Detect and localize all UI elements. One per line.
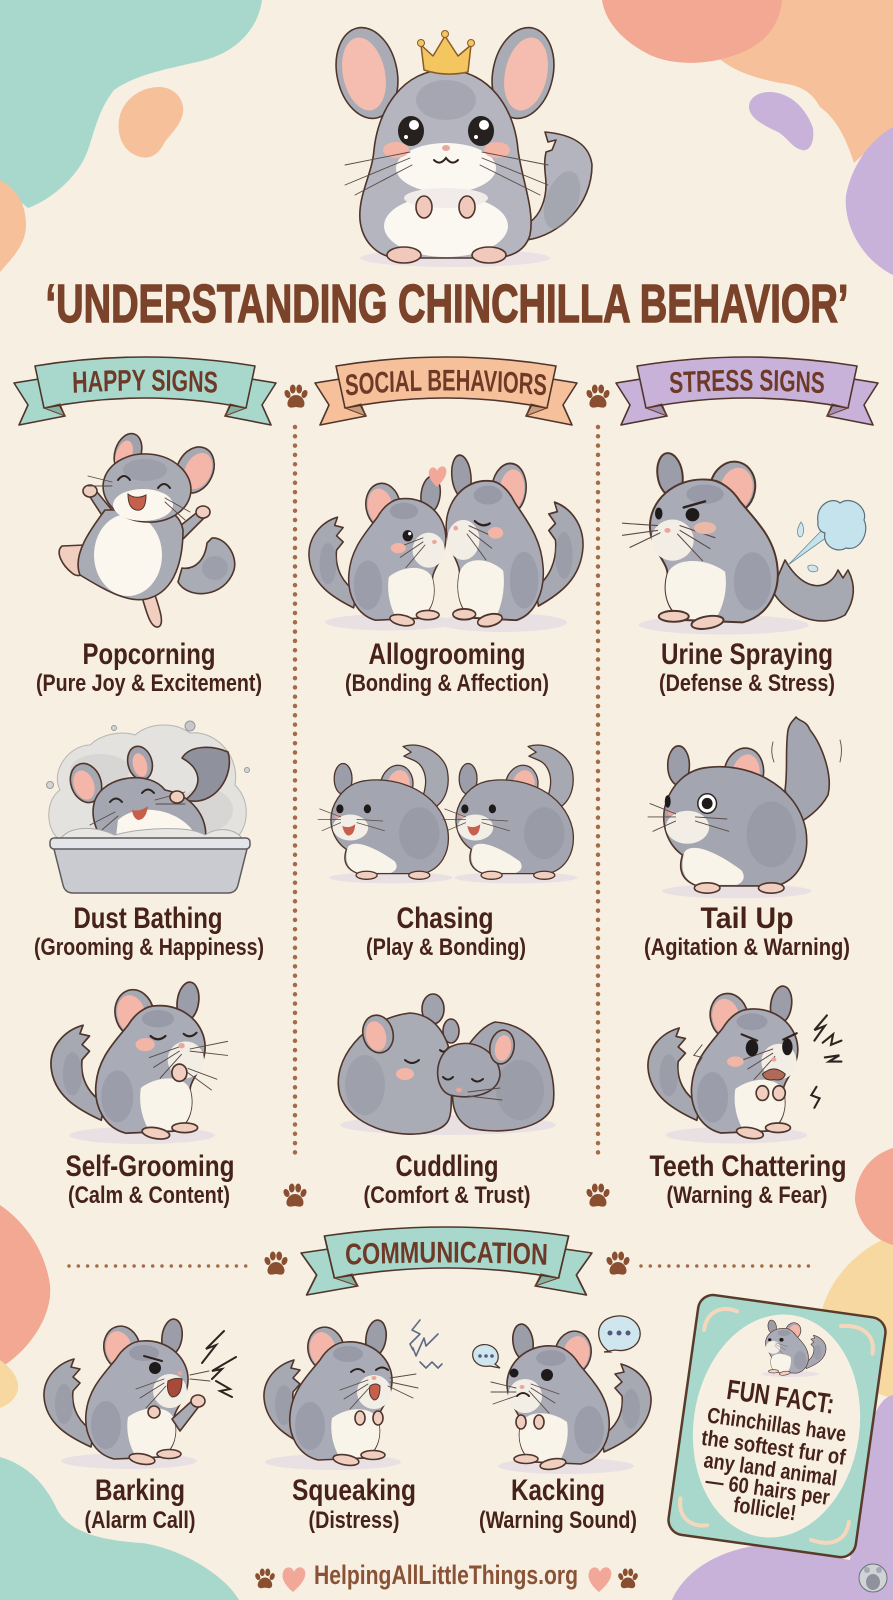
panel: stress signs xyxy=(615,356,879,1209)
blob: top-left teal xyxy=(0,0,262,208)
dotted line right xyxy=(641,1264,815,1268)
illustration: popcorning xyxy=(59,430,235,627)
label: tail up: Tail Up xyxy=(700,902,794,935)
blob: bottom-left yellow xyxy=(0,1360,18,1408)
label: barking xyxy=(84,1474,196,1534)
label: barking: Barking xyxy=(95,1474,185,1507)
banner: social behaviors xyxy=(314,356,578,426)
banner: stress signs xyxy=(615,356,879,426)
callout: fun fact card xyxy=(667,1293,887,1559)
illustration: self-grooming xyxy=(51,981,228,1144)
icon: paw left xyxy=(263,1252,289,1275)
label: kacking xyxy=(479,1474,637,1534)
icon: heart right xyxy=(589,1567,611,1592)
icon: speech bubble small xyxy=(473,1345,500,1368)
label: tail up: (Agitation & Warning) xyxy=(644,934,850,961)
callout: fun fact card: follicle! xyxy=(732,1492,798,1525)
icon: paw lower right xyxy=(585,1184,611,1207)
banner: stress signs: STRESS SIGNS xyxy=(670,370,824,394)
label: cuddling: Cuddling xyxy=(396,1150,498,1183)
blob: bottom-right purple xyxy=(672,1395,893,1600)
label: popcorning: (Pure Joy & Excitement) xyxy=(36,670,262,697)
callout: fun fact card: Chinchillas have xyxy=(706,1402,848,1447)
label: dust bathing: (Grooming & Happiness) xyxy=(34,934,264,961)
label: self-grooming: (Calm & Content) xyxy=(68,1182,230,1209)
label: self-grooming: Self-Grooming xyxy=(66,1150,234,1183)
icon: paw right xyxy=(605,1252,631,1275)
label: dust bathing: Dust Bathing xyxy=(74,902,222,935)
icon: paw right xyxy=(617,1569,639,1588)
label: dust bathing xyxy=(34,902,264,961)
blob: left peach xyxy=(0,180,26,272)
label: squeaking xyxy=(292,1474,416,1534)
label: teeth chattering: (Warning & Fear) xyxy=(666,1182,828,1209)
label: kacking: (Warning Sound) xyxy=(479,1507,637,1534)
illustration: kacking xyxy=(473,1316,651,1474)
illustration: tail up xyxy=(648,717,842,898)
banner: communication: COMMUNICATION xyxy=(346,1242,547,1265)
illustration: allogrooming xyxy=(309,454,583,632)
banner: social behaviors: SOCIAL BEHAVIORS xyxy=(346,370,546,396)
label: chasing: Chasing xyxy=(396,902,494,935)
callout: fun fact card: any land animal xyxy=(702,1447,839,1491)
blob: small purple xyxy=(749,92,813,150)
banner: communication xyxy=(300,1226,593,1296)
label: popcorning: Popcorning xyxy=(82,638,216,671)
icon: paw top left xyxy=(283,384,309,408)
illustration: squeaking xyxy=(264,1319,442,1470)
callout: fun fact card: the softest fur of xyxy=(700,1425,848,1470)
label: allogrooming: Allogrooming xyxy=(368,638,526,671)
panel: happy signs xyxy=(13,356,316,1209)
banner: happy signs: HAPPY SIGNS xyxy=(73,370,217,393)
icon: paw xyxy=(254,1569,276,1588)
label: cuddling: (Comfort & Trust) xyxy=(364,1182,530,1209)
label: tail up xyxy=(644,902,850,961)
panel: social behaviors xyxy=(308,356,584,1209)
label: popcorning xyxy=(36,638,262,697)
banner: happy signs xyxy=(13,356,277,426)
label: chasing: (Play & Bonding) xyxy=(366,934,526,961)
illustration: dust bathing xyxy=(46,721,250,893)
icon: heart xyxy=(283,1567,305,1592)
icon: small chinchilla xyxy=(762,1320,826,1377)
label: urine spraying: (Defense & Stress) xyxy=(659,670,835,697)
blob: top-right coral xyxy=(602,0,782,63)
blob: small peach xyxy=(119,87,183,158)
label: kacking: Kacking xyxy=(511,1474,605,1507)
dotted line left xyxy=(69,1264,253,1268)
icon: speech bubble large xyxy=(599,1316,640,1352)
label: teeth chattering: Teeth Chattering xyxy=(650,1150,846,1183)
dotted divider right xyxy=(596,427,600,1155)
blob: bottom-left coral xyxy=(0,1205,50,1368)
illustration: chasing xyxy=(318,745,577,883)
footer xyxy=(254,1560,639,1592)
label: allogrooming xyxy=(345,638,549,697)
label: self-grooming xyxy=(66,1150,234,1209)
blob: bottom-right coral xyxy=(855,1148,893,1245)
illustration: teeth chattering xyxy=(648,985,841,1144)
label: chasing xyxy=(366,902,526,961)
blob: bottom-right yellow xyxy=(822,1235,893,1398)
label: barking: (Alarm Call) xyxy=(84,1507,196,1534)
blob: bottom-left teal xyxy=(0,1457,239,1600)
label: urine spraying: Urine Spraying xyxy=(661,638,833,671)
icon: heart xyxy=(429,466,446,487)
hero chinchilla with crown xyxy=(328,22,592,267)
label: teeth chattering xyxy=(650,1150,846,1209)
callout: fun fact card: — 60 hairs per xyxy=(704,1468,832,1510)
callout: fun fact card: FUN FACT: xyxy=(725,1374,836,1420)
illustration: urine spraying xyxy=(622,452,866,634)
website url: HelpingAllLittleThings.org xyxy=(314,1560,578,1590)
panel: communication xyxy=(43,1226,856,1554)
label: allogrooming: (Bonding & Affection) xyxy=(345,670,549,697)
illustration: cuddling xyxy=(338,994,556,1135)
illustration: barking xyxy=(44,1318,236,1469)
icon: paw top right xyxy=(585,384,611,408)
icon: paw lower left xyxy=(282,1184,308,1207)
label: squeaking: (Distress) xyxy=(308,1507,400,1534)
blob: top-right peach xyxy=(717,0,893,163)
label: urine spraying xyxy=(659,638,835,697)
icon: corner logo xyxy=(859,1564,887,1592)
label: cuddling xyxy=(364,1150,530,1209)
dotted divider left xyxy=(293,427,297,1155)
label: squeaking: Squeaking xyxy=(292,1474,416,1507)
blob: right purple xyxy=(846,127,893,275)
